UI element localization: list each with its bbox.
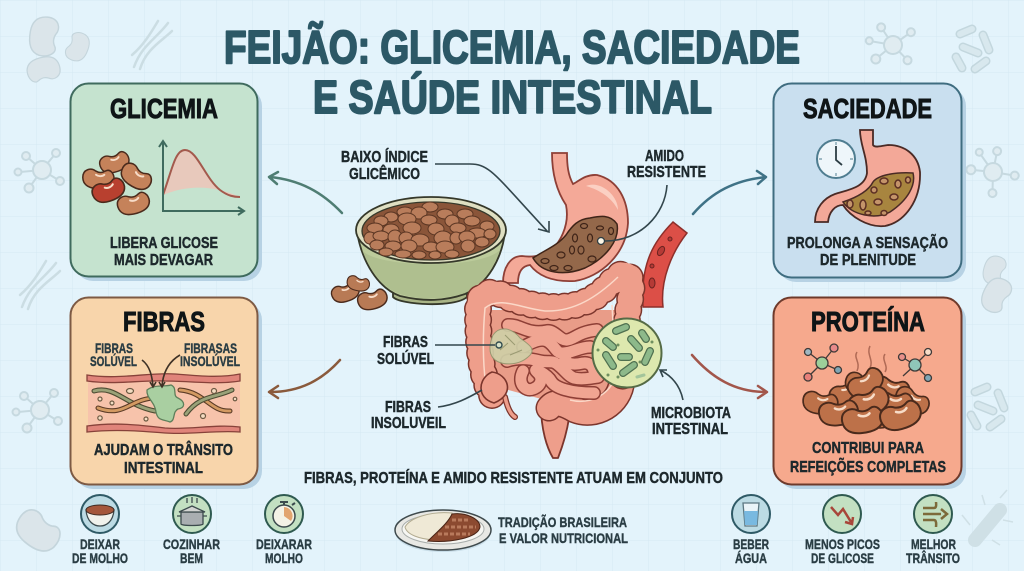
plate caption: E VALOR NUTRICIONAL <box>499 530 628 546</box>
panel: glicemia <box>70 84 262 281</box>
callout: fibras insoluvel: INSOLUVEIL <box>371 415 446 432</box>
title: E SAÚDE INTESTINAL <box>313 71 712 123</box>
panel: saciedade <box>774 84 966 282</box>
panel: fibras: FIBRASAS <box>184 340 237 356</box>
panel: saciedade: PROLONGA A SENSAÇÃO <box>787 232 948 252</box>
icon: melhor transito <box>906 495 960 566</box>
panel: saciedade: DE PLENITUDE <box>820 252 916 269</box>
panel: fibras: INTESTINAL <box>124 460 203 477</box>
panel: fibras: AJUDAM O TRÂNSITO <box>94 440 233 459</box>
panel: saciedade: SACIEDADE <box>803 93 932 124</box>
callout: amido resistente: RESISTENTE <box>627 164 706 181</box>
callout: microbiota intestinal <box>651 370 731 438</box>
icon: beber agua <box>732 495 770 566</box>
panel: fibras: SOLÚVEL <box>90 352 137 369</box>
panel: glicemia: LIBERA GLICOSE <box>110 235 218 252</box>
microbiota magnified circle <box>592 318 662 388</box>
icon: menos picos de glicose <box>805 495 880 566</box>
callout: fibras soluvel: SOLÚVEL <box>377 349 434 368</box>
icon: beber agua: BEBER <box>733 536 769 552</box>
panel: proteina <box>774 298 966 489</box>
icon: cozinhar bem: BEM <box>180 550 203 566</box>
icon: deixarar molho stopwatch: MOLHO <box>265 550 303 566</box>
illustration: intestines <box>478 274 631 458</box>
icon: loose beans <box>330 274 389 312</box>
panel: fibras: FIBRAS <box>95 340 133 356</box>
callout: microbiota intestinal: INTESTINAL <box>652 421 728 438</box>
icon: deixar de molho: DEIXAR <box>80 536 120 552</box>
callout: baixo indice glicemico: BAIXO ÍNDICE <box>341 147 428 166</box>
panel: glicemia: GLICEMIA <box>110 93 218 124</box>
illustration: bowl of beans <box>356 197 506 304</box>
arrows from center to panels <box>269 171 767 398</box>
fiber patch <box>490 329 532 364</box>
icon: stomach with food <box>815 130 920 226</box>
small intestine <box>507 325 598 393</box>
illustration: stomach <box>503 153 628 283</box>
icon: deixarar molho stopwatch: DEIXARAR <box>256 536 312 552</box>
callout: amido resistente <box>605 148 706 241</box>
callout: amido resistente: AMIDO <box>645 148 684 165</box>
icon: clock <box>817 140 855 178</box>
title: FEIJÃO: GLICEMIA, SACIEDADE <box>224 21 800 73</box>
callout: fibras insoluvel: FIBRAS <box>385 399 431 416</box>
large intestine <box>478 274 631 458</box>
panel: proteina: PROTEÍNA <box>811 306 925 337</box>
panel: fibras: FIBRAS <box>123 306 205 337</box>
callout: fibras soluvel: FIBRAS <box>383 334 428 351</box>
icon: beber agua: ÁGUA <box>735 550 767 566</box>
icon: melhor transito: TRÂNSITO <box>906 549 960 566</box>
callout: baixo indice glicemico <box>341 147 549 232</box>
icon: deixarar molho stopwatch <box>256 495 312 566</box>
intestine cross-section <box>87 355 240 433</box>
icon: menos picos de glicose: MENOS PICOS <box>805 536 880 552</box>
icon: melhor transito: MELHOR <box>911 536 956 552</box>
panel: proteina: CONTRIBUI PARA <box>812 440 924 457</box>
icon: cozinhar bem <box>163 495 220 566</box>
callout: microbiota intestinal: MICROBIOTA <box>651 405 731 422</box>
icon: deixar de molho: DE MOLHO <box>72 550 128 566</box>
icon: beans <box>82 150 154 217</box>
icon: bean pile <box>801 365 932 435</box>
panel: fibras <box>70 298 262 489</box>
panel: fibras: INSOLÚVEL <box>180 352 240 369</box>
chart: glucose curve <box>159 141 244 215</box>
icon: cozinhar bem: COZINHAR <box>163 536 220 552</box>
panel: glicemia: MAIS DEVAGAR <box>114 252 213 269</box>
callout: fibras soluvel <box>377 334 502 368</box>
illustration: artery <box>634 222 687 307</box>
icon: deixar de molho <box>72 495 128 566</box>
plate caption: TRADIÇÃO BRASILEIRA <box>498 513 627 530</box>
title <box>224 21 800 123</box>
icon: menos picos de glicose: DE GLICOSE <box>811 550 874 566</box>
panel: proteina: REFEIÇÕES COMPLETAS <box>790 456 946 476</box>
plate caption <box>498 513 628 546</box>
summary line: FIBRAS, PROTEÍNA E AMIDO RESISTENTE ATUAM EM CONJUNTO <box>304 468 723 487</box>
icon: molecules and steam <box>804 344 932 382</box>
icon: brazilian plate <box>395 510 491 552</box>
callout: fibras insoluvel <box>371 390 482 432</box>
callout: baixo indice glicemico: GLICÊMICO <box>349 164 420 183</box>
